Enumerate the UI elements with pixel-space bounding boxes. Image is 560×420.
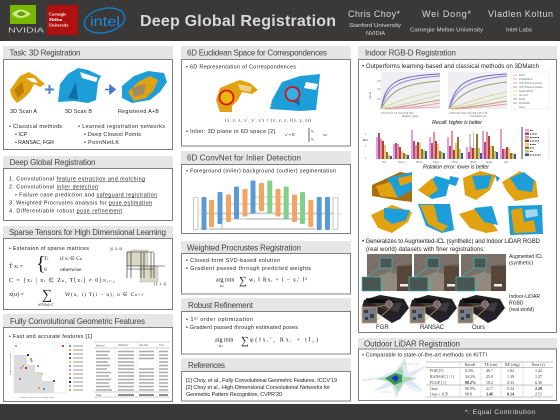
row: Augmented ICL thumbnails bbox=[362, 254, 506, 291]
equations: { bbox=[36, 253, 46, 275]
bullet: • Comparable to state-of-the-art methods on KITTI bbox=[362, 352, 487, 358]
results table: FGR [9] bbox=[430, 368, 444, 373]
label: Indoor LiDAR RGBD bbox=[509, 294, 540, 313]
learned methods bbox=[78, 124, 165, 146]
chart legend bbox=[69, 345, 83, 391]
bullet: • Foreground (inlier) background (outlier) segmentation bbox=[186, 168, 336, 174]
heading: Sparse Tensors for High Dimensional Learning bbox=[9, 228, 166, 237]
line chart: rotation: Recall bbox=[369, 92, 372, 99]
results table: Ours + ICP bbox=[430, 392, 449, 396]
results table: FCGF [1] bbox=[430, 380, 446, 385]
arrow bbox=[105, 86, 115, 94]
classical methods: • ICP bbox=[15, 132, 28, 138]
bar chart: rotation error: Hotel bbox=[470, 161, 476, 164]
bullets bbox=[186, 258, 311, 272]
line chart legend: ICP (Point-to-point) bbox=[519, 81, 542, 85]
numbered list: 1. Convolutional feature extraction and matching bbox=[9, 176, 145, 182]
formula: (x, y, z, x′, y′, z′) = (x, y, z, f(x, y, z)) bbox=[225, 118, 311, 124]
panel: Outdoor LiDAR Registration bbox=[358, 338, 557, 400]
line chart legend: FGR bbox=[519, 97, 525, 101]
line chart: translation bbox=[448, 72, 507, 118]
classical methods bbox=[9, 124, 62, 146]
yellow scan with red circle bbox=[216, 80, 258, 112]
reference list bbox=[186, 378, 337, 398]
cube diagram: (1, 1, 1) bbox=[154, 282, 166, 286]
line chart: rotation: Rotation (deg) bbox=[402, 115, 418, 118]
authors bbox=[348, 9, 553, 37]
matrix: x₂ bbox=[311, 136, 315, 141]
blue scan with red circle bbox=[270, 74, 320, 111]
reference list: Geometric Pattern Recognition, CVPR’20 bbox=[186, 392, 282, 398]
results table: 34.2% bbox=[465, 374, 476, 379]
logo: Carnegie Mellon University: Mellon bbox=[49, 17, 63, 22]
line chart: rotation: 0.2 bbox=[377, 98, 381, 101]
results table: 3DMatch bbox=[118, 344, 129, 347]
bar chart: rotation error: Home bbox=[416, 161, 423, 164]
results table: 98.2% bbox=[465, 380, 476, 385]
equations: otherwise bbox=[60, 267, 82, 273]
equations: i∈N(u)∩C bbox=[38, 303, 55, 307]
matrix: x′ = R bbox=[285, 132, 295, 137]
plus bbox=[45, 85, 54, 94]
equations: ∑ bbox=[42, 288, 52, 303]
heading: Outdoor LiDAR Registration bbox=[364, 340, 460, 348]
equations: T̃ xi = bbox=[9, 262, 24, 270]
bullet 2: • Inlier: 3D plane in 6D space [2] bbox=[186, 129, 276, 135]
results table: with Rot. bbox=[139, 344, 149, 347]
line chart legend: DCP bbox=[519, 73, 525, 77]
bullet: generalizes: (real world) datasets with finer registrations: bbox=[366, 247, 485, 253]
results table: TE (cm) bbox=[484, 362, 498, 367]
equations: C = {xi | xi ∈ Zn, T[xi] ≠ 0}Nᵢ₌₁ bbox=[9, 277, 115, 284]
method labels: FGR bbox=[376, 325, 389, 331]
results table: Time (s) bbox=[531, 362, 545, 367]
label: Augmented ICL: (synthetic) bbox=[509, 260, 533, 266]
scan labels: 3D Scan A bbox=[10, 109, 37, 115]
bar chart: rotation error: Kitc bbox=[382, 161, 387, 164]
bullets: • Gradient passed through predicted weights bbox=[186, 266, 311, 272]
heading: Indoor RGB-D Registration bbox=[365, 48, 456, 58]
scan labels: 3D Scan B bbox=[65, 109, 92, 115]
results table: 3.46 bbox=[486, 392, 493, 396]
formula: R,t bbox=[220, 284, 224, 289]
results table: Time bbox=[159, 344, 165, 347]
bar chart: rotation error: Hotel bbox=[452, 161, 458, 164]
registered A+B bbox=[122, 71, 167, 103]
results table: RANSAC [11] bbox=[430, 374, 454, 379]
logo: Carnegie Mellon University: University bbox=[49, 22, 69, 28]
line chart legend bbox=[511, 72, 549, 109]
heading: 6D ConvNet for Inlier Detection bbox=[187, 154, 301, 162]
scan B bbox=[58, 68, 101, 103]
authors: Stanford University bbox=[349, 23, 402, 29]
formula: φ(‖xᵢ′, Rxᵢ + t‖₂) bbox=[250, 336, 318, 344]
bullet: • 6D Representation of Correspondences bbox=[186, 64, 296, 70]
results table bbox=[94, 342, 170, 397]
numbered list: 4. Differentiable robust pose refinement bbox=[9, 208, 122, 214]
results table: 0.14 bbox=[507, 392, 514, 396]
LiDAR point cloud bbox=[362, 357, 428, 398]
recall caption: Recall: higher is better bbox=[432, 120, 482, 126]
line chart: rotation: 0.6 bbox=[377, 88, 381, 91]
authors: Chris Choy* bbox=[348, 9, 400, 19]
results table: Method bbox=[96, 344, 105, 348]
panel: Fully Convolutional Geometric Features bbox=[3, 314, 173, 402]
label: Indoor LiDAR RGBD: RGBD bbox=[509, 300, 524, 306]
formula bbox=[216, 275, 307, 289]
numbered list: 3. Weighted Procrustes analysis for pose estimation bbox=[9, 200, 152, 206]
scan A bbox=[10, 72, 45, 103]
bullet: generalizes bbox=[362, 239, 541, 253]
panel: Robust Refinement bbox=[181, 298, 351, 354]
heading: Deep Global Registration bbox=[10, 158, 96, 167]
equations: if xi ∈ Cn bbox=[60, 255, 82, 262]
bullets: • 1ˢᵗ order optimization bbox=[186, 317, 253, 323]
scatter chart: Feature matching recall bbox=[9, 354, 12, 375]
scan labels: Registered A+B bbox=[118, 109, 159, 115]
equations: x(u) = bbox=[9, 291, 24, 298]
heading: Weighted Procrustes Registration bbox=[187, 244, 301, 252]
gallery of registered scenes bbox=[371, 171, 543, 235]
scatter chart: Number of feature per scan (log scale) bbox=[20, 396, 54, 399]
formula: R,t bbox=[219, 344, 223, 349]
heading: Task: Task: 3D Registration bbox=[10, 48, 80, 58]
results table: Ours bbox=[430, 386, 438, 391]
bullet: • Fast and accurate features [1] bbox=[9, 334, 92, 340]
authors: Intel Labs bbox=[506, 28, 533, 34]
panel: Sparse Tensors bbox=[3, 226, 173, 310]
matrix: x₁ bbox=[311, 128, 315, 133]
scatter chart bbox=[9, 343, 83, 399]
results table: 2.29 bbox=[535, 386, 542, 391]
line chart: rotation: 0.8 bbox=[377, 80, 381, 83]
logo: Intel bbox=[82, 5, 127, 36]
classical methods: • RANSAC, FGR bbox=[15, 140, 54, 146]
line chart legend: Super4PCS bbox=[519, 89, 533, 93]
formula: arg min bbox=[215, 338, 233, 344]
heading: 6D Euclidean Space for Correspondences bbox=[187, 48, 327, 58]
panel: 6D ConvNet bbox=[181, 151, 351, 234]
equations: Ti bbox=[44, 256, 49, 262]
panel: Deep Global Registration bbox=[3, 156, 173, 220]
numbered list bbox=[9, 176, 157, 214]
bar chart: rotation error bbox=[363, 129, 515, 164]
numbered list: 2. Convolutional inlier detection bbox=[9, 184, 98, 190]
equations bbox=[9, 253, 143, 307]
results table: RE (deg) bbox=[505, 362, 520, 367]
formula: arg min bbox=[216, 278, 234, 284]
heading: Robust Refinement bbox=[188, 301, 254, 310]
results table: 98.0 bbox=[465, 392, 472, 396]
results table: 6.38 bbox=[535, 380, 542, 385]
numbered list: • Failure case prediction and safeguard registration bbox=[15, 192, 157, 198]
results table: 2.51 bbox=[535, 392, 542, 396]
bullet: generalizes: • Generalizes to Augmented-ICL (synthetic) and Indoor LiDAR RGBD bbox=[362, 239, 541, 245]
results table: 1.39 bbox=[507, 374, 514, 379]
method labels bbox=[376, 325, 485, 331]
authors: Carnegie Mellon University bbox=[410, 28, 484, 34]
bullets: • Closed-form SVD-based solution bbox=[186, 258, 280, 264]
formula: wᵢ ‖ Rxᵢ + t − xᵢ′ ‖² bbox=[249, 278, 307, 284]
header band bbox=[0, 0, 560, 41]
line chart legend: ICP (Point-to-plane) bbox=[519, 85, 543, 89]
method labels: RANSAC bbox=[420, 325, 445, 331]
U-Net diagram bbox=[194, 180, 342, 230]
heading: References bbox=[188, 361, 225, 370]
bullet: • Extension of sparse matrices bbox=[9, 246, 89, 252]
bullet: • Outperforms learning-based and classical methods on 3DMatch bbox=[362, 64, 539, 70]
label: Indoor LiDAR RGBD: (real world) bbox=[509, 307, 534, 313]
results table: 98.9% bbox=[465, 386, 476, 391]
label: Augmented ICL bbox=[509, 254, 543, 266]
scan labels bbox=[10, 109, 159, 115]
bullets bbox=[186, 317, 298, 331]
learned methods: • Learned registration networks bbox=[78, 124, 165, 130]
results table: 0.2% bbox=[465, 368, 474, 373]
logo: NVIDIA: NVIDIA bbox=[8, 28, 45, 34]
results table: 21.7 bbox=[486, 386, 493, 391]
results table: 40.7 bbox=[486, 368, 493, 373]
logo: Intel: intel bbox=[90, 13, 120, 29]
line chart: translation: 0.00 0.05 0.10 0.15 0.20 0.25 0.30 bbox=[449, 112, 488, 115]
matrix bbox=[285, 128, 327, 142]
line chart legend: PointNetLK bbox=[519, 77, 533, 81]
learned methods: • PointNetLK bbox=[84, 140, 119, 146]
authors: Vladlen Koltun bbox=[488, 9, 553, 19]
panel: 6D Euclidean Space bbox=[181, 46, 351, 146]
rotation caption: Rotation error: lower is better bbox=[423, 164, 489, 170]
line chart legend: RANSAC bbox=[519, 101, 530, 105]
panel: Task 3D Registration bbox=[3, 46, 173, 150]
results table: 10.2 bbox=[486, 380, 493, 385]
bar chart: rotation error: Home bbox=[398, 161, 405, 164]
results table: Recall bbox=[465, 362, 476, 367]
line chart: translation: Translation (m) bbox=[470, 115, 487, 118]
line chart legend: Ours bbox=[519, 105, 525, 109]
results table: 0.34 bbox=[507, 386, 514, 391]
title: Deep Global Registration bbox=[140, 13, 336, 30]
formula: ∑ bbox=[239, 275, 247, 287]
method labels: Ours bbox=[472, 325, 485, 331]
formula: ∑ bbox=[241, 335, 249, 347]
formula bbox=[215, 335, 318, 349]
results table: 25.9 bbox=[486, 374, 493, 379]
logo: NVIDIA bbox=[8, 5, 45, 34]
bullets: • Gradient passed through estimated poses bbox=[186, 325, 298, 331]
equations: W(u, i) T(i − u), u ∈ Cn+1 bbox=[65, 291, 143, 298]
bar chart: rotation error: Study bbox=[486, 161, 493, 164]
footnote: *: Equal Contribution bbox=[465, 409, 535, 416]
learned methods: • Deep Closest Points bbox=[84, 132, 141, 138]
line chart legend: Go-ICP bbox=[519, 93, 528, 97]
reference list: [1] Choy, et al., Fully Convolutional Geometric Features, ICCV’19 bbox=[186, 378, 337, 384]
line chart: rotation bbox=[369, 72, 440, 118]
cube diagram: (0, 0, 0) bbox=[110, 247, 122, 251]
equations: 0 bbox=[44, 267, 47, 273]
bar chart: rotation error: Rot bbox=[363, 138, 368, 142]
heading: Fully Convolutional Geometric Features bbox=[10, 317, 145, 326]
line chart: rotation: 0.0 2.5 5.0 7.5 10.0 12.5 15.0 bbox=[381, 112, 414, 115]
results table: 0.33 bbox=[507, 380, 514, 385]
footer band bbox=[0, 404, 560, 420]
results table: Ours bbox=[96, 394, 102, 397]
results table: 1.37 bbox=[535, 374, 542, 379]
logo: Carnegie Mellon University bbox=[47, 5, 78, 35]
logo: Carnegie Mellon University: Carnegie bbox=[49, 12, 66, 16]
row: Indoor LiDAR thumbnails bbox=[362, 295, 505, 323]
panel: Indoor RGB-D Registration bbox=[358, 46, 557, 332]
results table bbox=[426, 362, 553, 397]
label: Indoor LiDAR RGBD: Indoor-LiDAR bbox=[509, 294, 540, 300]
cube diagram bbox=[110, 247, 166, 286]
authors: NVIDIA bbox=[366, 31, 386, 37]
bar chart: rotation error: Lab bbox=[504, 161, 509, 164]
bar legend bbox=[522, 127, 549, 159]
reference list: [2] Choy et al., High-Dimensional Convolutional Networks for bbox=[186, 385, 330, 391]
bar chart: rotation error: Hotel bbox=[433, 161, 439, 164]
results table: 1.02 bbox=[507, 368, 514, 373]
results table: 1.42 bbox=[535, 368, 542, 373]
classical methods: • Classical methods bbox=[9, 124, 62, 130]
panel: References bbox=[181, 358, 351, 401]
panel: Weighted Procrustes Registration bbox=[181, 241, 351, 294]
authors: Wei Dong* bbox=[422, 9, 471, 19]
label: Augmented ICL: Augmented ICL bbox=[509, 254, 543, 260]
